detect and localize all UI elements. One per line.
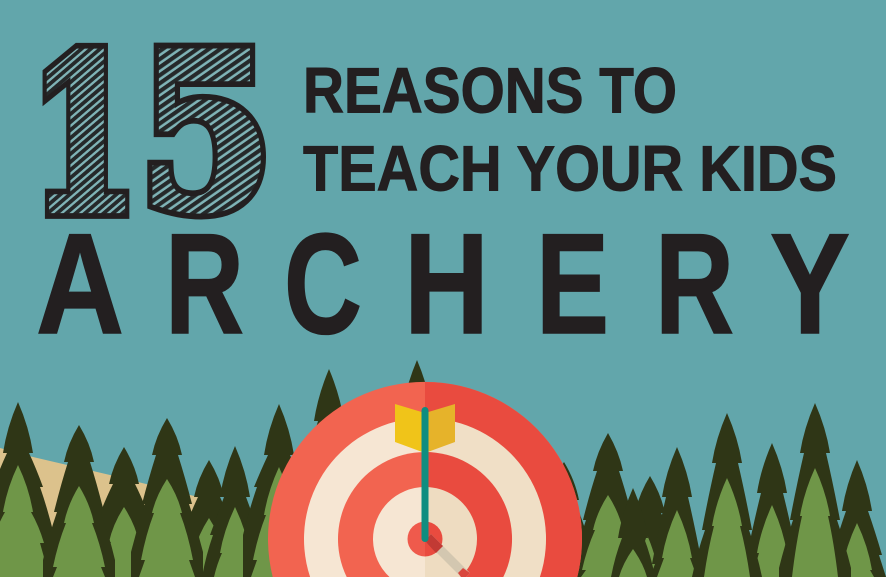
subtitle line 2: TEACH YOUR KIDS bbox=[303, 132, 837, 204]
numeral 15 bbox=[30, 7, 273, 261]
arrow shadow bbox=[425, 534, 470, 577]
sand hill bbox=[0, 448, 275, 577]
title: ARCHERY: E bbox=[536, 205, 609, 364]
numeral 15: 1 bbox=[30, 11, 138, 261]
numeral 15: 5 bbox=[139, 7, 273, 260]
title: ARCHERY: A bbox=[36, 205, 124, 364]
target: left-lit rings bbox=[268, 382, 582, 577]
title: ARCHERY: H bbox=[404, 205, 489, 364]
arrow fletching bbox=[395, 404, 455, 453]
subtitle line 1: REASONS TO bbox=[303, 54, 677, 126]
arrow shaft bbox=[422, 407, 428, 542]
forest: right group bbox=[532, 403, 886, 577]
forest: left group bbox=[0, 360, 432, 577]
title: ARCHERY bbox=[36, 205, 850, 364]
arrow bbox=[395, 404, 455, 542]
title: ARCHERY: Y bbox=[770, 205, 850, 364]
title: ARCHERY: R bbox=[655, 205, 734, 364]
numeral 15: 5 bbox=[139, 7, 273, 260]
target: shaded right half bbox=[425, 382, 582, 577]
title: ARCHERY: C bbox=[284, 205, 362, 364]
numeral 15: 1 bbox=[30, 11, 138, 261]
title: ARCHERY: R bbox=[165, 205, 244, 364]
target bbox=[268, 382, 582, 577]
